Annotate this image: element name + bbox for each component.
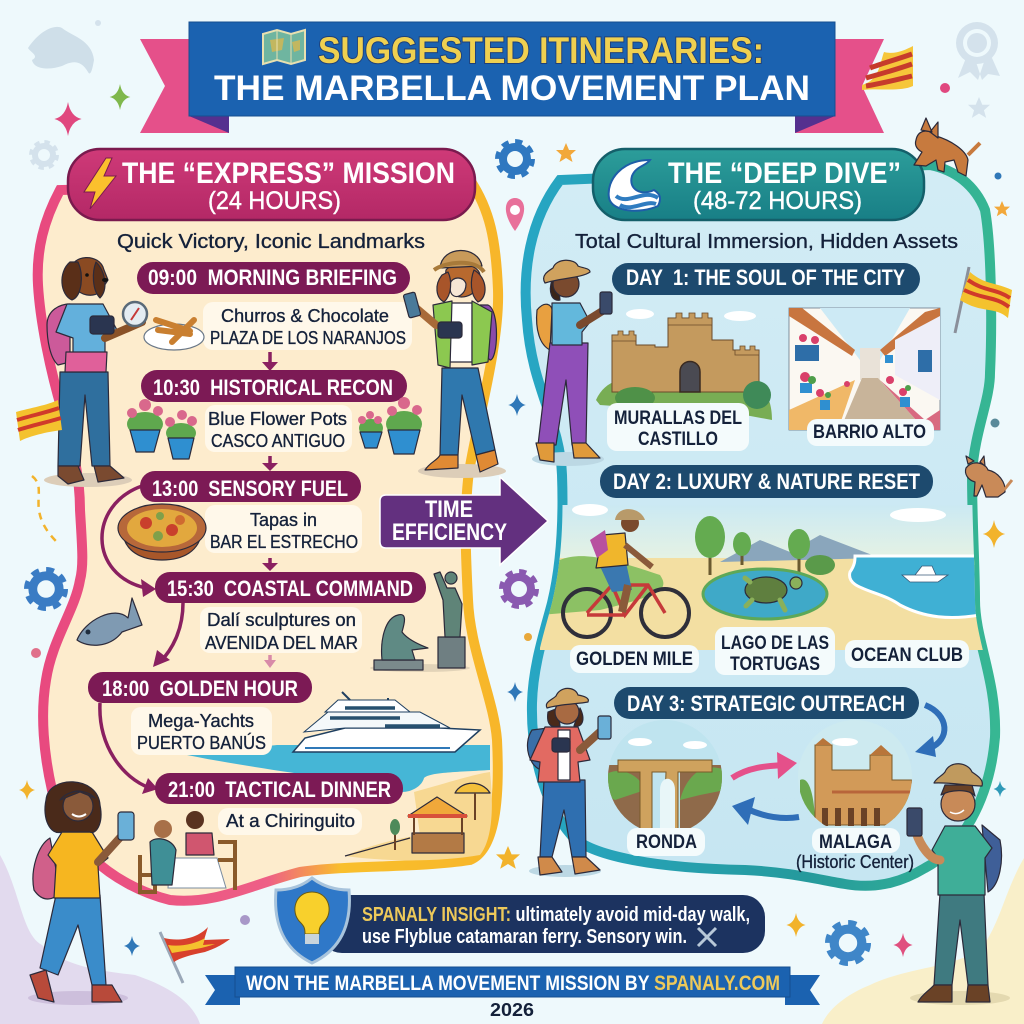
scene: whitewashed street xyxy=(789,308,940,430)
decoration: mid-page marks xyxy=(19,394,1006,869)
step 13:00: 13:00 SENSORY FUEL xyxy=(152,476,348,501)
card: ronda xyxy=(627,828,705,856)
arrow: ronda to malaga xyxy=(732,752,797,779)
step 18:00 xyxy=(88,672,312,703)
header pill xyxy=(593,149,924,220)
icon: cat on deep dive header xyxy=(914,118,980,176)
card: murallas: MURALLAS DEL xyxy=(614,408,742,429)
flag: catalan left xyxy=(16,400,62,441)
day 2 pill: DAY 2: LUXURY & NATURE RESET xyxy=(613,469,920,494)
header pill xyxy=(68,149,475,220)
header line 1: THE “DEEP DIVE” xyxy=(668,157,901,190)
panel: express mission xyxy=(38,149,498,901)
panel body xyxy=(38,180,498,901)
cards: day 2 places xyxy=(570,627,969,675)
icon: shield with bulb xyxy=(276,878,349,963)
icon: fish xyxy=(77,598,142,645)
arrow: curved blue xyxy=(915,705,944,757)
small flag on ribbon xyxy=(862,46,913,90)
card: ronda: RONDA xyxy=(636,832,697,853)
character: man bottom-right xyxy=(907,764,1010,1005)
card: malaga: (Historic Center) xyxy=(796,852,914,872)
icon: wave xyxy=(609,160,660,211)
subtitle: Quick Victory, Iconic Landmarks xyxy=(117,231,425,253)
blob: bottom-left lilac xyxy=(0,855,200,1024)
decoration: gears, stars and pin between headers xyxy=(498,142,1010,231)
title line 2: THE MARBELLA MOVEMENT PLAN xyxy=(214,69,810,108)
day 1 pill: DAY 1: THE SOUL OF THE CITY xyxy=(626,265,905,290)
step 15:30 xyxy=(155,572,426,603)
banner ribbon tails xyxy=(140,39,884,133)
decoration: faded map top-left xyxy=(28,27,94,74)
icon: crossed swords xyxy=(698,928,716,946)
icon: dining scene xyxy=(140,811,235,892)
scene: coast landscape xyxy=(540,504,1000,650)
icon: bronze sculptures xyxy=(370,572,470,672)
character: hound explorer with phone xyxy=(403,250,506,478)
card: flower pots: Blue Flower Pots xyxy=(208,409,347,429)
card: sculptures: AVENIDA DEL MAR xyxy=(205,633,358,653)
sea band behind yacht xyxy=(187,745,490,792)
header line 1: THE “EXPRESS” MISSION xyxy=(122,157,455,190)
card: churros: PLAZA DE LOS NARANJOS xyxy=(210,328,406,348)
icon: flower pots right xyxy=(358,397,422,454)
cards: day 2 places: OCEAN CLUB xyxy=(851,645,963,666)
card: tapas: Tapas in xyxy=(250,510,317,530)
card: barrio alto: BARRIO ALTO xyxy=(813,422,926,443)
card: murallas xyxy=(607,403,749,451)
arrow: malaga to ronda xyxy=(732,797,799,825)
card: malaga: MALAGA xyxy=(819,832,892,853)
icon: kitten right side xyxy=(965,456,1012,497)
blob: bottom-right cream xyxy=(822,858,1024,1024)
day 3 pill: DAY 3: STRATEGIC OUTREACH xyxy=(627,691,905,716)
flag: catalan right xyxy=(955,267,1012,333)
card: tapas: BAR EL ESTRECHO xyxy=(210,532,358,552)
insight line 2: use Flyblue catamaran ferry. Sensory win. xyxy=(362,926,687,948)
icon: turtle pond xyxy=(703,569,827,619)
header line 2: (24 HOURS) xyxy=(208,187,341,215)
card: murallas: CASTILLO xyxy=(638,429,718,450)
day 2 pill xyxy=(600,465,933,498)
insight callout xyxy=(276,878,765,963)
step 18:00: 18:00 GOLDEN HOUR xyxy=(102,676,298,701)
panel body xyxy=(526,165,995,886)
callout bar xyxy=(320,895,765,953)
card: yachts: Mega-Yachts xyxy=(148,711,254,731)
card: churros: Churros & Chocolate xyxy=(221,306,389,326)
scene: castle xyxy=(596,309,772,420)
card: yachts: PUERTO BANÚS xyxy=(137,732,266,753)
cards: day 2 places: GOLDEN MILE xyxy=(576,649,693,670)
icon: churros plate xyxy=(144,320,204,350)
footer tails xyxy=(205,975,820,1005)
footer banner xyxy=(205,967,820,1005)
decoration: sparkles and dots top xyxy=(31,20,1002,180)
step 21:00: 21:00 TACTICAL DINNER xyxy=(168,777,391,802)
card: chiringuito xyxy=(218,808,362,835)
icon: beach hut and parasol xyxy=(345,783,490,856)
card: chiringuito: At a Chiringuito xyxy=(226,811,355,831)
character: woman day 3 with camera xyxy=(527,688,611,877)
cards: day 2 places: LAGO DE LAS xyxy=(721,633,829,654)
day 3 pill xyxy=(614,687,919,719)
step 10:30: 10:30 HISTORICAL RECON xyxy=(153,375,393,400)
step 13:00 xyxy=(140,471,361,502)
footer text: WON THE MARBELLA MOVEMENT MISSION BY SPANALY.COM xyxy=(246,972,780,995)
character: hound explorer with compass xyxy=(44,258,147,487)
year: 2026 xyxy=(490,1000,534,1020)
arrow label line 1: TIME xyxy=(425,496,473,523)
step 21:00 xyxy=(155,773,403,804)
subtitle: Total Cultural Immersion, Hidden Assets xyxy=(575,231,958,253)
day 1 pill xyxy=(612,263,920,295)
card: tapas xyxy=(205,505,362,553)
decoration: faded award badge xyxy=(956,22,1000,80)
icon: malaga cathedral circle xyxy=(800,738,912,826)
character: woman with phone in purple xyxy=(532,260,612,466)
icon: ronda bridge circle xyxy=(605,720,725,830)
step 09:00 xyxy=(137,262,410,294)
card: flower pots: CASCO ANTIGUO xyxy=(211,431,345,451)
icon: yacht xyxy=(293,692,480,752)
icon: flower pots left xyxy=(127,399,197,459)
icon: cyclist xyxy=(563,509,689,637)
connector arrows xyxy=(100,352,278,794)
title banner xyxy=(140,22,913,133)
icon: paella xyxy=(118,504,206,560)
card: yachts xyxy=(131,707,272,755)
time label: 09:00 MORNING BRIEFING xyxy=(148,265,397,290)
card: churros xyxy=(203,302,412,350)
insight line 1: SPANALY INSIGHT: ultimately avoid mid-day walk, xyxy=(362,904,750,926)
decoration: bottom marks xyxy=(124,913,913,963)
icon: lightning xyxy=(84,158,116,209)
arrow label line 2: EFFICIENCY xyxy=(392,519,507,546)
card: sculptures xyxy=(200,607,362,653)
card: sculptures: Dalí sculptures on xyxy=(207,610,356,630)
cards: day 2 places: TORTUGAS xyxy=(730,654,820,675)
step 15:30: 15:30 COASTAL COMMAND xyxy=(167,576,413,601)
panel: deep dive xyxy=(526,149,1000,886)
card: flower pots xyxy=(205,405,352,452)
character: woman bottom-left walking xyxy=(28,782,134,1005)
icon: map xyxy=(263,30,305,64)
arrow: time efficiency xyxy=(380,477,548,565)
card: malaga xyxy=(796,828,914,872)
sand at chiringuito xyxy=(345,772,492,860)
title line 1: SUGGESTED ITINERARIES: xyxy=(318,30,764,71)
flag: spain xyxy=(160,927,230,983)
step 10:30 xyxy=(141,370,407,402)
header line 2: (48-72 HOURS) xyxy=(693,187,862,215)
